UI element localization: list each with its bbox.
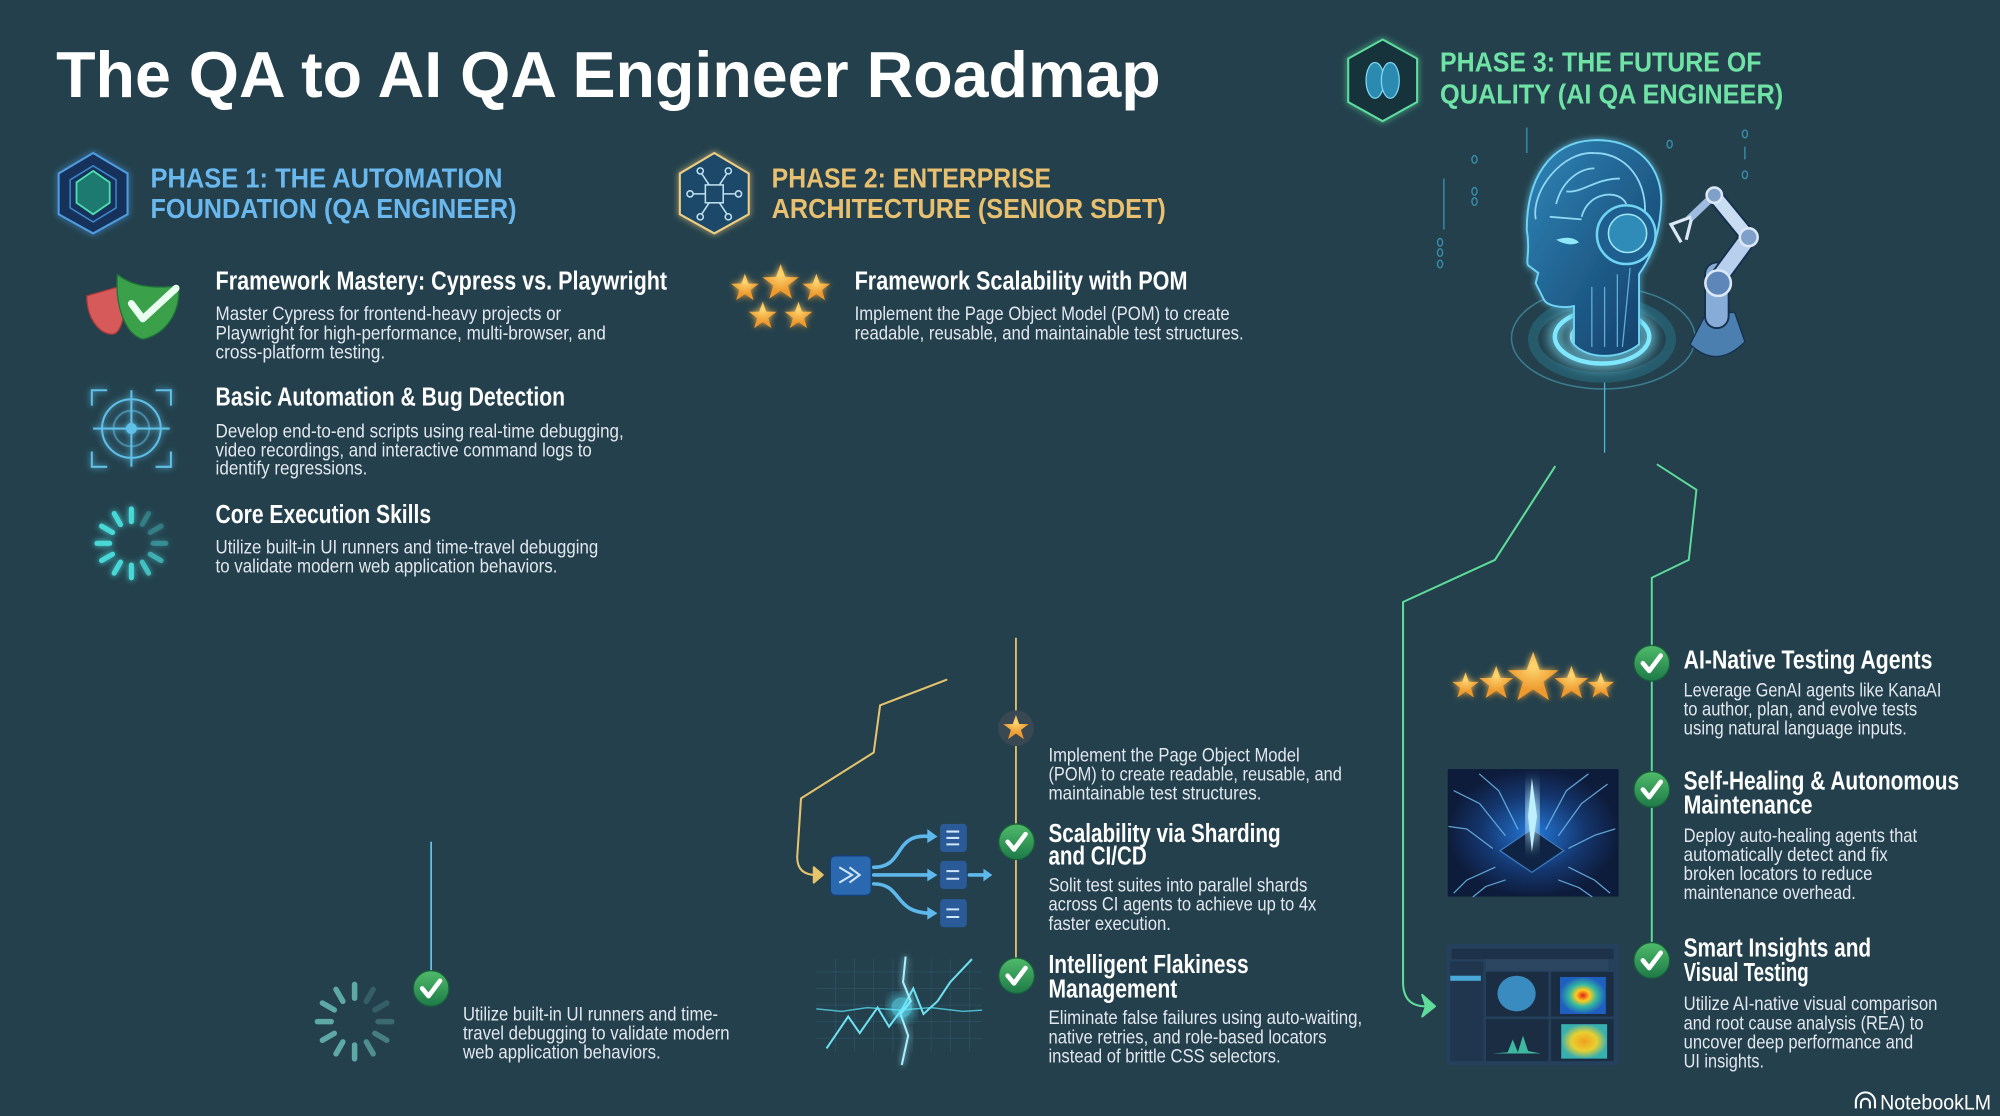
star badge	[998, 710, 1034, 746]
text: pom detail	[1048, 745, 1342, 805]
server stacks	[964, 407, 1036, 529]
item: framework mastery: Master Cypress for frontend-heavy projects or	[216, 304, 562, 325]
text: pom detail: Implement the Page Object Model	[1048, 745, 1300, 766]
item: framework scalability	[855, 268, 1244, 344]
item: smart insights: UI insights.	[1684, 1052, 1764, 1073]
item: smart insights: Utilize AI-native visual comparison	[1684, 994, 1937, 1015]
item: self-healing: maintenance overhead.	[1684, 883, 1856, 904]
icon: sharding flow	[830, 824, 992, 927]
item: scalability via sharding: Scalability via Sharding	[1048, 820, 1281, 848]
item: self-healing	[1684, 767, 1959, 904]
phase 2 heading: ARCHITECTURE (SENIOR SDET)	[772, 193, 1166, 224]
phase 2 connector line	[703, 237, 823, 523]
engineer with laptop	[1089, 484, 1153, 622]
icon: flakiness signal chart	[816, 957, 982, 1065]
circuit traces: phase 1 to phase 2	[474, 607, 931, 842]
item: self-healing: automatically detect and fix	[1684, 845, 1888, 866]
contact pads: phase 2 lower left	[797, 601, 949, 691]
hooded person	[269, 677, 386, 855]
inner traces	[842, 389, 1110, 625]
green arrow line to dashboard	[1403, 467, 1555, 1017]
item: intelligent flakiness	[1048, 951, 1362, 1067]
item: scalability via sharding: and CI/CD	[1048, 843, 1147, 871]
glass backing	[182, 638, 533, 829]
phase 3 connector line	[1348, 115, 1421, 459]
item: basic automation	[216, 384, 624, 479]
item: core execution	[216, 501, 598, 578]
phase 1 connector line	[60, 237, 172, 793]
left screen panel	[198, 611, 353, 816]
phase 3 heading	[1440, 46, 1783, 109]
robot arm	[1671, 187, 1758, 357]
item: framework scalability: readable, reusable, and maintainable test structures.	[855, 323, 1244, 344]
item: self-healing: broken locators to reduce	[1684, 864, 1872, 885]
digital data dots	[1438, 128, 1747, 268]
cloud small	[822, 439, 869, 463]
item: basic automation: video recordings, and interactive command logs to	[216, 441, 592, 462]
spinner phase 1 lower	[317, 984, 392, 1059]
item: smart insights: Visual Testing	[1684, 959, 1809, 987]
glass backing	[832, 363, 1171, 580]
ai head	[1527, 140, 1661, 356]
item: framework mastery: Framework Mastery: Cypress vs. Playwright	[216, 268, 668, 296]
item: intelligent flakiness: Management	[1048, 975, 1178, 1003]
icon: target crosshair	[92, 390, 171, 467]
icon: five stars row	[1452, 652, 1614, 700]
text: core execution detail: Utilize built-in UI runners and time-	[463, 1004, 718, 1025]
item: smart insights: Smart Insights and	[1684, 935, 1871, 963]
text: pom detail: (POM) to create readable, reusable, and	[1048, 765, 1342, 786]
engineer with laptop: USDET	[1121, 517, 1153, 533]
item: basic automation: Develop end-to-end scripts using real-time debugging,	[216, 421, 624, 442]
contact pads: phase 3 lower left	[1402, 383, 1804, 472]
item: ai-native agents	[1684, 646, 1941, 740]
phase 1 heading: PHASE 1: THE AUTOMATION	[151, 162, 503, 193]
phase 3 badge	[1348, 40, 1417, 121]
right screen panel with bug magnifier	[372, 611, 513, 816]
phase 1 badge	[59, 153, 128, 233]
glowing base rings	[1511, 287, 1695, 453]
item: basic automation: identify regressions.	[216, 458, 367, 479]
circuit traces: phase 1 lower left	[0, 861, 300, 1116]
text: pom detail: maintainable test structures.	[1048, 784, 1261, 805]
watermark: NotebookLM	[1880, 1090, 1991, 1115]
circuit traces: gold traces lower right of phase 2	[1134, 551, 1365, 686]
phase 3 heading: QUALITY (AI QA ENGINEER)	[1440, 78, 1783, 109]
phase 3 timeline	[1634, 464, 1696, 978]
item: intelligent flakiness: Intelligent Flakiness	[1048, 951, 1249, 979]
item: core execution: Utilize built-in UI runners and time-travel debugging	[216, 538, 598, 559]
item: ai-native agents: using natural language inputs.	[1684, 719, 1907, 740]
gold dot line node	[1013, 626, 1020, 634]
item: smart insights: and root cause analysis (REA) to	[1684, 1013, 1923, 1034]
item: intelligent flakiness: instead of brittle CSS selectors.	[1048, 1046, 1281, 1067]
phase 1 vertical drop line	[430, 842, 432, 972]
icon: chip with circuits	[1448, 769, 1619, 897]
phase 2 timeline	[998, 638, 1034, 994]
item: scalability via sharding: across CI agents to achieve up to 4x	[1048, 895, 1317, 916]
headset	[1597, 205, 1656, 264]
wave mesh upper	[551, 568, 759, 663]
cloud gear	[882, 390, 947, 422]
circuit traces: phase 3 upper left	[1210, 147, 1499, 351]
item: ai-native agents: Leverage GenAI agents like KanaAI	[1684, 680, 1941, 701]
laptop	[306, 761, 448, 862]
item: ai-native agents: to author, plan, and evolve tests	[1684, 700, 1917, 721]
circuit traces: phase 3 lower right	[1677, 390, 1976, 561]
item: scalability via sharding: faster execution.	[1048, 914, 1171, 935]
circuit traces: blue below phase 2	[781, 482, 1222, 721]
phase 1 heading	[151, 162, 517, 224]
pads: phase 1 lower left	[162, 806, 556, 946]
icon: loading spinner	[97, 509, 166, 578]
item: scalability via sharding: Solit test suites into parallel shards	[1048, 876, 1307, 897]
item: framework scalability: Framework Scalability with POM	[855, 268, 1188, 296]
icon: dashboard screenshot	[1446, 944, 1619, 1065]
text: core execution detail: web application behaviors.	[462, 1043, 661, 1064]
phase 2 badge	[680, 153, 749, 233]
pedestal	[1097, 607, 1163, 661]
icon: five gold stars	[731, 264, 830, 328]
item: framework scalability: Implement the Page Object Model (POM) to create	[855, 304, 1230, 325]
item: intelligent flakiness: Eliminate false failures using auto-waiting,	[1048, 1008, 1362, 1029]
phase 2 heading: PHASE 2: ENTERPRISE	[772, 162, 1051, 193]
phase 1 heading: FOUNDATION (QA ENGINEER)	[151, 193, 517, 224]
item: framework mastery: cross-platform testing.	[216, 342, 385, 363]
cloud brain	[1047, 395, 1145, 444]
item: framework mastery: Playwright for high-performance, multi-browser, and	[216, 323, 606, 344]
phase 2 heading	[772, 162, 1166, 224]
circuit traces: phase 3 bundle to phase 2	[1154, 389, 1536, 599]
icon: comedy masks with check	[87, 274, 179, 339]
check badge phase 1	[413, 971, 449, 1006]
gold arrow to sharding icon	[797, 680, 946, 883]
title: The QA to AI QA Engineer Roadmap	[56, 38, 1161, 111]
iso modules	[936, 495, 1099, 616]
item: core execution: to validate modern web application behaviors.	[216, 557, 557, 578]
circuit traces: phase 3 upper right	[1741, 51, 2000, 357]
item: intelligent flakiness: native retries, and role-based locators	[1048, 1027, 1327, 1048]
item: framework mastery	[216, 268, 668, 363]
item: ai-native agents: AI-Native Testing Agents	[1684, 646, 1932, 674]
wave mesh lower left	[0, 886, 232, 1084]
item: smart insights: uncover deep performance and	[1684, 1032, 1913, 1053]
item: smart insights	[1684, 935, 1938, 1073]
glass backing	[1422, 117, 1788, 334]
item: core execution: Core Execution Skills	[216, 501, 431, 529]
item: self-healing: Maintenance	[1684, 792, 1812, 820]
text: core execution detail: travel debugging to validate modern	[463, 1023, 730, 1044]
item: scalability via sharding	[1048, 820, 1317, 935]
text: core execution detail	[462, 1004, 730, 1064]
phase 3 heading: PHASE 3: THE FUTURE OF	[1440, 46, 1761, 77]
item: self-healing: Deploy auto-healing agents that	[1684, 826, 1918, 847]
item: basic automation: Basic Automation & Bug Detection	[216, 384, 565, 412]
